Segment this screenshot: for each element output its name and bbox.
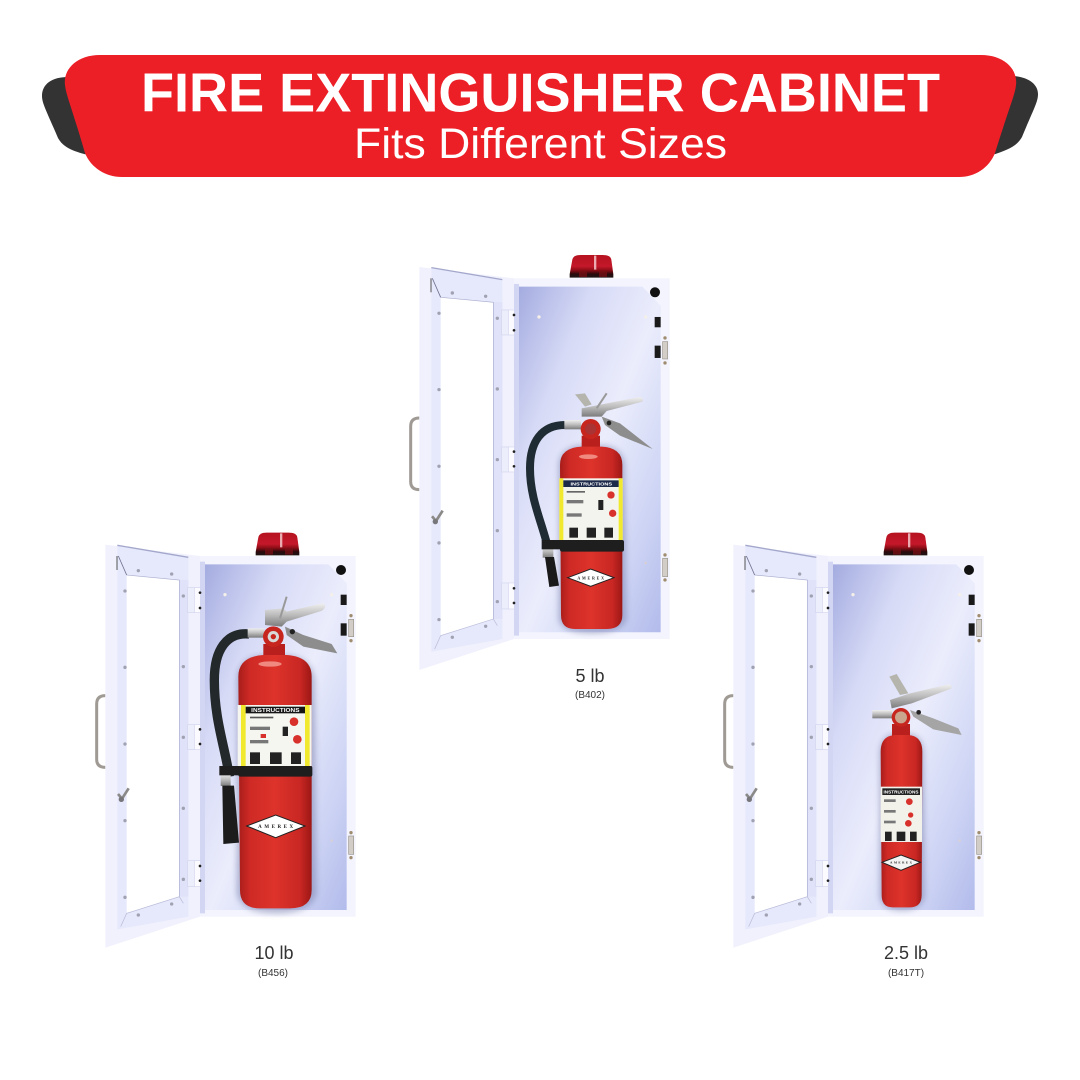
caption: 2.5 lb: 2.5 lb <box>884 943 928 963</box>
cabinet body <box>826 556 984 917</box>
right ribbon fold <box>992 76 1038 155</box>
brand logo: AMEREX <box>577 575 604 580</box>
instruction label <box>238 705 312 766</box>
open door <box>411 267 515 670</box>
brand logo <box>882 855 920 870</box>
10 lb cabinet <box>97 533 356 948</box>
10 lb extinguisher <box>214 597 337 913</box>
instruction label: INSTRUCTIONS <box>883 790 919 796</box>
2.5 lb cabinet <box>725 533 984 948</box>
title: FIRE EXTINGUISHER CABINET <box>141 62 940 124</box>
caption: 5 lb: 5 lb <box>575 666 605 686</box>
brand logo: AMEREX <box>890 861 913 865</box>
caption: 5 lb: (B402) <box>575 690 605 701</box>
caption: 10 lb: 10 lb <box>254 943 294 963</box>
instruction label <box>881 787 922 842</box>
brand logo <box>568 569 614 586</box>
header banner <box>42 55 1038 177</box>
instruction label: INSTRUCTIONS <box>251 708 300 714</box>
5 lb extinguisher <box>530 393 653 633</box>
5 lb cabinet <box>411 255 670 670</box>
caption: 2.5 lb: (B417T) <box>888 968 924 979</box>
caption: 10 lb <box>254 943 294 979</box>
brand logo <box>247 815 305 838</box>
brand logo: AMEREX <box>258 825 294 830</box>
red banner <box>65 55 1016 177</box>
caption: 5 lb <box>575 666 605 701</box>
open door <box>97 545 201 948</box>
red beacon <box>884 533 927 555</box>
instruction label: INSTRUCTIONS <box>570 482 613 488</box>
red beacon <box>570 255 613 278</box>
cabinet body <box>512 278 670 639</box>
subtitle: Fits Different Sizes <box>354 120 727 168</box>
open door <box>725 545 829 948</box>
caption: 10 lb: (B456) <box>258 968 288 979</box>
caption: 2.5 lb <box>884 943 928 979</box>
red beacon <box>256 533 299 555</box>
2.5 lb extinguisher <box>872 674 962 911</box>
left ribbon fold <box>42 77 88 155</box>
cabinet body <box>198 556 356 917</box>
instruction label <box>559 478 623 540</box>
